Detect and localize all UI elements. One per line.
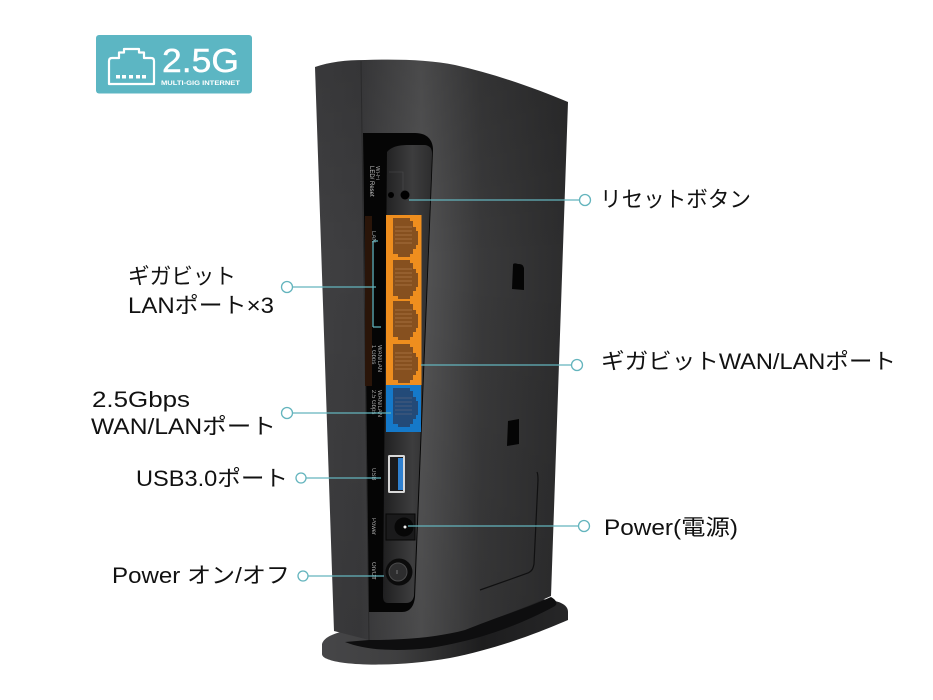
router illustration bbox=[315, 60, 568, 665]
badge: 2.5G multi-gig internet bbox=[96, 35, 252, 94]
label: 2.5Gbps WAN/LAN port: 2.5Gbps bbox=[92, 387, 190, 412]
mounting slots bbox=[507, 263, 524, 446]
USB port bbox=[388, 455, 405, 493]
callout: reset bbox=[409, 194, 590, 206]
reset button bbox=[388, 172, 410, 200]
callout lines bbox=[282, 194, 590, 581]
rotated port text: 2.5 Gbps bbox=[370, 390, 376, 414]
rotated port text bbox=[368, 166, 382, 580]
rotated port text: LED/ Reset bbox=[368, 166, 374, 197]
label: gigabit LAN ports bbox=[128, 264, 274, 318]
rotated port text: WAN/LAN bbox=[376, 390, 382, 417]
badge subtitle: MULTI-GIG INTERNET bbox=[161, 80, 240, 87]
callout: 2.5G port bbox=[282, 408, 391, 418]
router body bbox=[315, 60, 568, 640]
side panel groove bbox=[480, 472, 538, 590]
label: gigabit WAN/LAN port: ギガビットWAN/LANポート bbox=[601, 349, 896, 374]
label: power: Power(電源) bbox=[604, 515, 738, 540]
callout: LAN ports bbox=[282, 241, 381, 327]
label: gigabit LAN ports: LANポート×3 bbox=[128, 293, 274, 318]
label: 2.5Gbps WAN/LAN port: WAN/LANポート bbox=[91, 414, 276, 439]
port recess bbox=[363, 133, 433, 612]
label: USB 3.0 port: USB3.0ポート bbox=[136, 466, 288, 491]
rotated port text: 1 Gbps bbox=[370, 345, 376, 364]
router base bbox=[322, 599, 568, 665]
blue 2.5G port bbox=[386, 385, 421, 432]
label: 2.5Gbps WAN/LAN port bbox=[91, 387, 276, 439]
badge heading: 2.5G bbox=[162, 42, 239, 79]
callout: USB bbox=[296, 473, 381, 483]
rotated port text: Wi-Fi bbox=[374, 166, 380, 180]
label: gigabit LAN ports: ギガビット bbox=[128, 264, 236, 289]
rotated port text: LAN bbox=[370, 231, 376, 243]
label: power on/off: Power オン/オフ bbox=[112, 563, 290, 588]
callout: on/off bbox=[298, 571, 384, 581]
power on/off button bbox=[386, 558, 412, 586]
rotated port text: Power bbox=[370, 518, 376, 535]
label: reset button: リセットボタン bbox=[600, 187, 751, 212]
red-brown strip beside LAN ports bbox=[365, 216, 372, 386]
inner panel bbox=[383, 145, 432, 603]
rotated port text: WAN/LAN bbox=[376, 345, 382, 372]
callout: power bbox=[408, 520, 590, 532]
rotated port text: USB bbox=[370, 468, 376, 480]
orange gigabit ports bbox=[386, 215, 422, 385]
callout: WAN/LAN gigabit bbox=[421, 360, 582, 370]
rotated port text: On/Off bbox=[370, 562, 376, 580]
icon: ethernet port bbox=[109, 49, 154, 84]
power jack bbox=[386, 514, 415, 540]
